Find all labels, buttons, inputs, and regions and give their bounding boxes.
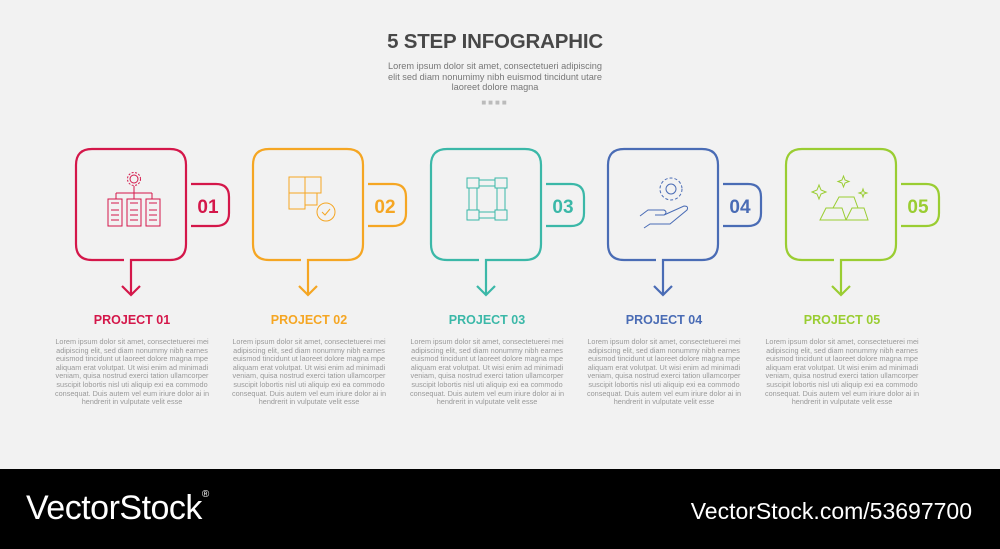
icon: hands	[467, 178, 507, 220]
step 4	[587, 148, 762, 406]
icon: servers	[108, 172, 160, 226]
heading: PROJECT 03	[449, 313, 525, 327]
number tab	[191, 184, 229, 226]
heading: PROJECT 04	[626, 313, 702, 327]
subtitle: elit sed diam nonumimy nibh euismod tincidunt utare	[388, 72, 602, 82]
subtitle: laoreet dolore magna	[452, 82, 538, 92]
icon: gold bars	[812, 176, 868, 220]
box with arrow	[786, 149, 896, 295]
box with arrow	[431, 149, 541, 295]
number tab	[901, 184, 939, 226]
box with arrow	[608, 149, 718, 295]
step 3	[410, 148, 586, 406]
footer logo: VectorStock®	[26, 489, 209, 527]
step 2	[232, 148, 408, 406]
heading: PROJECT 01	[94, 313, 170, 327]
number tab: 01	[197, 197, 219, 218]
text: Lorem ipsum dolor sit amet, consectetuerei mei adipiscing elit, sed diam nonummy nibh earnes euismod tincidunt ut laoreet dolore magna mpe aliquam erat volutpat. Ut wisi enim ad minimadi veniam, quisa nostrud exerci tation ullamcorper suscipit lobortis nisl uti aliquip exi ea commodo consequat. Duis autem vel eum iriure dolor ai in hendrerit in vulputate velit esse	[55, 337, 209, 406]
number tab: 05	[907, 197, 929, 218]
text: Lorem ipsum dolor sit amet, consectetuerei mei adipiscing elit, sed diam nonummy nibh earnes euismod tincidunt ut laoreet dolore magna mpe aliquam erat volutpat. Ut wisi enim ad minimadi veniam, quisa nostrud exerci tation ullamcorper suscipit lobortis nisl uti aliquip exi ea commodo consequat. Duis autem vel eum iriure dolor ai in hendrerit in vulputate velit esse	[232, 337, 386, 406]
number tab	[368, 184, 406, 226]
box with arrow	[76, 149, 186, 295]
number tab	[546, 184, 584, 226]
subtitle	[388, 61, 602, 92]
text: Lorem ipsum dolor sit amet, consectetuerei mei adipiscing elit, sed diam nonummy nibh earnes euismod tincidunt ut laoreet dolore magna mpe aliquam erat volutpat. Ut wisi enim ad minimadi veniam, quisa nostrud exerci tation ullamcorper suscipit lobortis nisl uti aliquip exi ea commodo consequat. Duis autem vel eum iriure dolor ai in hendrerit in vulputate velit esse	[765, 337, 919, 406]
text: Lorem ipsum dolor sit amet, consectetuerei mei adipiscing elit, sed diam nonummy nibh earnes euismod tincidunt ut laoreet dolore magna mpe aliquam erat volutpat. Ut wisi enim ad minimadi veniam, quisa nostrud exerci tation ullamcorper suscipit lobortis nisl uti aliquip exi ea commodo consequat. Duis autem vel eum iriure dolor ai in hendrerit in vulputate velit esse	[587, 337, 741, 406]
number tab: 02	[374, 197, 396, 218]
subtitle: Lorem ipsum dolor sit amet, consectetueri adipiscing	[388, 61, 602, 71]
footer	[0, 469, 1000, 549]
text: Lorem ipsum dolor sit amet, consectetuerei mei adipiscing elit, sed diam nonummy nibh earnes euismod tincidunt ut laoreet dolore magna mpe aliquam erat volutpat. Ut wisi enim ad minimadi veniam, quisa nostrud exerci tation ullamcorper suscipit lobortis nisl uti aliquip exi ea commodo consequat. Duis autem vel eum iriure dolor ai in hendrerit in vulputate velit esse	[410, 337, 564, 406]
icon: gear on hand	[640, 178, 688, 228]
dots: ■■■■	[481, 98, 509, 107]
title: 5 STEP INFOGRAPHIC	[387, 30, 603, 53]
number tab: 04	[729, 197, 751, 218]
number tab: 03	[552, 197, 574, 218]
step 1	[55, 148, 230, 406]
box with arrow	[253, 149, 363, 295]
step 5	[765, 148, 940, 406]
number tab	[723, 184, 761, 226]
heading: PROJECT 05	[804, 313, 880, 327]
heading: PROJECT 02	[271, 313, 347, 327]
icon: puzzle	[289, 177, 335, 221]
footer url: VectorStock.com/53697700	[691, 498, 972, 524]
